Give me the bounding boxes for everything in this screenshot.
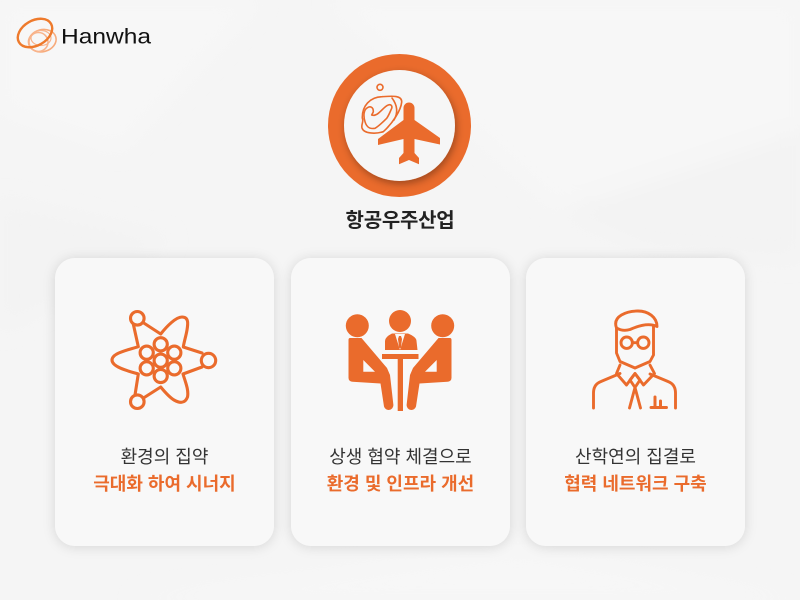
title: 항공우주산업 <box>346 210 454 232</box>
icon: planet <box>362 84 402 133</box>
orange ring <box>328 54 471 197</box>
logo wordmark: Hanwha <box>61 26 151 48</box>
text: card 3 line 1: 산학연의 집결로 <box>575 447 696 467</box>
text: card 1 line 2: 극대화 하여 시너지 <box>93 474 236 494</box>
icon: atom <box>112 312 216 409</box>
panel: 상생 협약 <box>291 258 510 546</box>
icon: airplane <box>378 102 440 164</box>
text: card 2 line 2: 환경 및 인프라 개선 <box>327 474 474 494</box>
logo: Hanwha <box>16 18 151 53</box>
text: card 2 line 1: 상생 협약 체결으로 <box>329 447 472 467</box>
text: card 1 line 1: 환경의 집약 <box>121 447 208 467</box>
text: card 3 line 2: 협력 네트워크 구축 <box>564 474 707 494</box>
panel: 환경의 집약 <box>55 258 274 546</box>
logo rings <box>13 13 59 55</box>
central emblem: aerospace icon <box>328 54 471 197</box>
panel: 산학연 <box>526 258 745 546</box>
white disc <box>344 70 455 181</box>
icon: meeting at table <box>346 310 454 411</box>
icon: researcher with glasses <box>594 311 676 408</box>
